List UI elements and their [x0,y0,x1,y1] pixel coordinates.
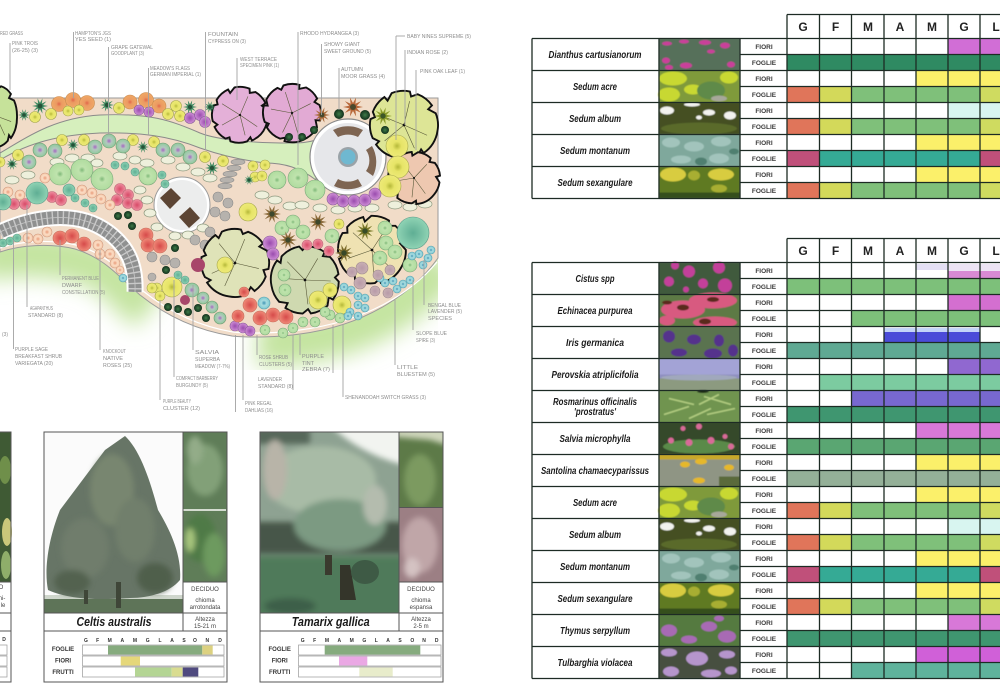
species names: Thymus serpyllum [560,625,630,637]
row labels: FIORI [755,44,773,51]
species names: Dianthus cartusianorum [548,49,642,61]
row labels: FOGLIE [752,444,777,451]
months: O [193,638,197,644]
month headers [798,244,1000,258]
photo: leaves and flowers [183,432,226,582]
cream shrubs [5,152,432,240]
teal shrubs [0,161,429,284]
plant labels: ZEBRA (7) [302,367,330,373]
months: M [108,638,112,644]
months: L [375,638,378,644]
green and purple shrubs [22,134,226,324]
plant labels: SPECIES [428,316,453,322]
habit note [190,587,221,630]
plant labels: SHENANDOAH SWITCH GRASS (3) [345,395,426,401]
plant labels: BLUESTEM (5) [397,372,435,378]
month headers: L [992,244,1000,258]
bed edge line [0,241,437,333]
row labels: FIORI [755,556,773,563]
month headers: M [863,20,873,34]
month headers: F [832,244,839,258]
peach perennials [3,173,124,274]
months: G [301,638,305,644]
months: S [182,638,186,644]
row labels: FIORI [755,172,773,179]
plant labels: NATIVE [103,356,124,362]
plant labels: SLOPE BLUE [416,331,448,337]
months: F [96,638,99,644]
plant labels: (26-25) (3) [12,48,38,54]
plant labels: GOODPLANT (3) [111,51,144,57]
months: G [362,638,366,644]
wine red shrubs [180,258,205,305]
grid lines [532,238,1000,678]
row labels: FOGLIE [752,412,777,419]
months: N [205,638,209,644]
phenology bars [298,645,441,677]
large seating circle [310,119,386,195]
plant labels: PURPLE SAGE [15,347,49,353]
row labels: FOGLIE [752,60,777,67]
habit note: chioma [195,598,215,604]
months: F [313,638,316,644]
plant labels: GRAPE GATEWAL [111,45,153,51]
months [301,638,439,644]
row labels: FIORI [755,76,773,83]
plant labels: RED GRASS [0,31,24,37]
dividers [44,432,227,631]
plant labels: PURPLE BEAUTY [163,399,191,405]
green lawn path [0,115,316,180]
habit note: espansa [410,605,433,611]
row labels: FOGLIE [752,156,777,163]
garden planting plan [0,31,471,414]
months: A [120,638,124,644]
spiky grasses [6,98,392,262]
row labels: FIORI [755,108,773,115]
plant labels: STANDARD (8) [258,384,293,390]
side text: le [1,603,6,609]
habit note: chioma [411,598,431,604]
habit note: Altezza [195,617,215,623]
colored calendar cells [787,38,1000,198]
plant labels: PURPLE [302,354,325,360]
month headers: M [927,244,937,258]
species names: Sedum album [569,113,621,125]
species names: Sedum album [569,529,621,541]
plant labels: BURGUNDY (5) [176,383,208,389]
species names: Sedum montanum [560,145,630,157]
photo: foliage [400,432,442,507]
plant labels: PINK TROIS [12,41,39,47]
row labels: FOGLIE [752,92,777,99]
months: N [422,638,426,644]
stone path [0,218,135,292]
mauve perennials [347,262,395,298]
row labels: FOGLIE [752,188,777,195]
months: D [435,638,439,644]
row labels: FOGLIE [52,647,74,653]
habit note [407,587,435,630]
plant labels: MEADOW (7-7%) [195,364,230,370]
row labels: FIORI [755,396,773,403]
planting bed [0,98,438,337]
row labels: FOGLIE [269,647,291,653]
months: O [410,638,414,644]
photo: pink flowers [399,508,442,582]
months: L [158,638,162,644]
month headers: L [992,20,1000,34]
plant labels: CONSTELLATION (5) [62,290,105,296]
photo: Celtis tree [44,432,183,613]
row labels: FOGLIE [752,572,777,579]
card background [44,432,227,682]
dark round shrubs [114,109,389,322]
plant labels: TINT [302,361,314,367]
month headers: M [927,20,937,34]
months: A [386,638,390,644]
months: G [146,638,150,644]
card: Tamarix gallica [255,425,447,682]
row labels [52,647,74,676]
row labels: FOGLIE [752,476,777,483]
plant labels: YES SEED (1) [75,37,111,43]
row labels: FOGLIE [752,604,777,611]
months: M [133,638,137,644]
months: M [325,638,329,644]
month headers: G [959,244,969,258]
plant labels: AGAPANTHUS [30,306,53,312]
row labels: FIORI [755,588,773,595]
months: D [218,638,222,644]
lawn around the bed [0,254,442,342]
plant photos [658,38,740,198]
plant labels: KNOCKOUT [103,349,126,355]
table: perennial calendar [532,238,1000,678]
plant labels: MOOR GRASS (4) [341,74,385,80]
row labels: FIORI [55,658,71,664]
row labels [752,268,777,675]
big tree canopies [0,73,451,319]
row labels: FOGLIE [752,540,777,547]
photo: Tamarix tree [260,432,398,612]
plant labels: PINK REGAL [245,401,272,407]
months: A [337,638,341,644]
species names: Sedum montanum [560,561,630,573]
plant labels: RHODO HYDRANGEA (3) [300,31,359,37]
grey stepping stones [147,159,245,281]
habit note: arrotondata [190,605,221,611]
row labels: FIORI [755,652,773,659]
phenology bars [82,645,224,677]
plant labels: SHOWY GIANT [324,42,360,48]
row labels: FOGLIE [752,316,777,323]
habit note: 15-21 m [194,624,216,630]
row labels: FOGLIE [752,348,777,355]
species names: Salvia microphylla [560,433,631,445]
plant photos [658,262,740,678]
card background [260,432,443,682]
species names: Iris germanica [566,337,624,349]
plant labels: VARIEGATA (20) [15,361,53,367]
month headers: A [896,20,905,34]
month headers: F [832,20,839,34]
species names [548,49,642,189]
row labels: FIORI [755,332,773,339]
plant labels: SALVIA [195,350,220,356]
species name: Tamarix gallica [292,614,370,629]
row labels: FOGLIE [752,668,777,675]
plant labels: COMPACT BARBERRY [176,376,219,382]
table: groundcover calendar [532,14,1000,198]
months: M [350,638,354,644]
plant labels: FOUNTAIN [208,32,238,38]
month headers: G [798,244,808,258]
month headers: G [959,20,969,34]
species names: Echinacea purpurea [558,305,633,317]
row labels [752,44,777,195]
row labels: FIORI [755,620,773,627]
months [84,638,222,644]
plant labels: BENGAL BLUE [428,303,462,309]
plant labels: LAVENDER (5) [428,309,462,315]
plant labels: (3) [2,332,8,338]
card frame [0,432,11,682]
row labels: FOGLIE [752,124,777,131]
row labels: FOGLIE [752,636,777,643]
plant labels: ROSE SHRUB [259,355,289,361]
plant labels: PERMANENT BLUE [62,276,100,282]
plant labels: DWARF [62,283,82,289]
row labels: FOGLIE [752,380,777,387]
species names: Sedum acre [573,81,617,93]
leader lines [10,32,424,412]
plant labels: DAHLIAS (16) [245,408,273,414]
row labels: FOGLIE [752,284,777,291]
plant labels: CLUSTER (12) [163,406,200,412]
plant labels: PINK OAK LEAF (1) [420,69,465,75]
months: A [170,638,174,644]
month letter: D [2,637,6,643]
orange perennials [52,92,166,113]
row labels: FIORI [755,140,773,147]
species names: 'prostratus' [574,406,616,418]
plant labels: BREAKFAST SHRUB [15,354,63,360]
month headers: M [863,244,873,258]
cyan perennials [119,246,435,320]
row labels: FIORI [755,524,773,531]
small seating circle [154,177,210,233]
plant labels [0,31,471,414]
row labels: FIORI [272,658,288,664]
plant labels: LITTLE [397,365,419,371]
species names: Sedum acre [573,497,617,509]
plant labels: BABY NINES SUPREME (5) [407,34,471,40]
plant labels: SUPERBA [195,357,221,363]
plant labels: SPIRE (3) [416,338,435,344]
colored calendar cells [787,264,1000,678]
purple perennials [134,105,381,336]
habit note: Altezza [411,617,431,623]
dividers [260,432,443,631]
species names: Rosmarinus officinalis [553,396,637,408]
row labels: FIORI [755,460,773,467]
phenology bars [0,645,7,677]
habit note: DECIDUO [407,587,435,593]
salmon perennials [53,228,293,325]
habit note: DECIDUO [191,587,219,593]
species names: Sedum sexangulare [558,177,633,189]
pink perennials [8,184,334,256]
month headers: A [896,244,905,258]
row labels: FIORI [755,268,773,275]
row labels: FIORI [755,300,773,307]
species name: Celtis australis [76,614,152,629]
grid lines [532,14,1000,198]
species names [541,273,649,669]
plant labels: ROSES (25) [103,363,132,369]
plant labels: AUTUMN [341,67,363,73]
yellow perennials [0,100,409,314]
months: G [84,638,88,644]
row labels: FOGLIE [752,508,777,515]
photo: foliage [0,432,12,582]
plant labels: MEADOW'S FLAGS [150,66,191,72]
light green shrubs [49,159,417,338]
species names: Perovskia atriplicifolia [552,369,639,381]
habit note: 2-5 m [413,624,429,630]
species names: Cistus spp [576,273,615,285]
row labels: FRUTTI [52,670,74,676]
card: Celtis australis [44,432,227,682]
side text [0,585,6,609]
plant labels: CYPRESS ON (3) [208,39,246,45]
species names: Santolina chamaecyparissus [541,465,649,477]
plant labels: GERMAN IMPERIAL (1) [150,72,201,78]
plant labels: SWEET GROUND (5) [324,49,371,55]
plant labels: CLUSTERS (5) [259,362,292,368]
plant labels: STANDARD (8) [28,313,63,319]
species names: Tulbarghia violacea [558,657,633,669]
plant labels: LAVENDER [258,377,282,383]
row labels [269,647,291,676]
row labels: FIORI [755,428,773,435]
plant labels: INDIAN ROSE (2) [407,50,448,56]
month headers: G [798,20,808,34]
row labels: FIORI [755,492,773,499]
month headers [798,20,1000,34]
card: partial tree at left edge [0,432,12,682]
plant labels: WEST TERRACE [240,57,278,63]
months: S [398,638,402,644]
row labels: FIORI [755,364,773,371]
species names: Sedum sexangulare [558,593,633,605]
row labels: FRUTTI [269,670,291,676]
plant labels: SPECIMEN PINK (1) [240,63,279,69]
plant labels: HAMPTON'S JGS [75,31,112,37]
